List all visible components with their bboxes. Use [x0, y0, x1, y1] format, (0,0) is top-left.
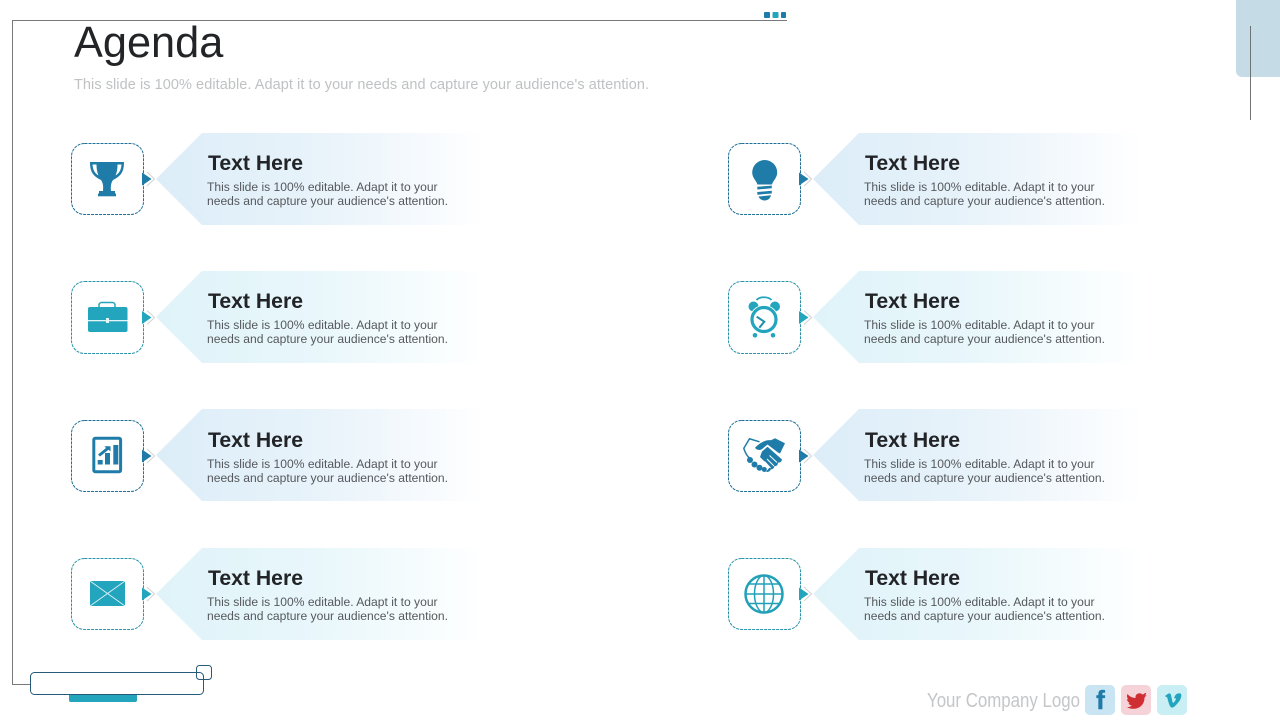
heading: Text Here: [208, 290, 303, 313]
item: light bulb: [728, 133, 1142, 225]
connector arrow: [142, 449, 154, 463]
subtitle: This slide is 100% editable. Adapt it to your needs and capture your audience's attention.: [74, 77, 649, 93]
connector arrow: [142, 172, 154, 186]
description: This slide is 100% editable. Adapt it to your: [207, 595, 438, 609]
description: needs and capture your audience's attention.: [207, 471, 448, 485]
icon box: [728, 282, 800, 354]
social icon: facebook: f: [1096, 685, 1105, 715]
heading: Text Here: [865, 152, 960, 175]
icon: trophy: [90, 162, 124, 196]
bottom left small square: [196, 666, 212, 680]
connector arrow: [142, 587, 154, 601]
social icon: facebook: [1085, 685, 1115, 715]
bottom left tab: [69, 692, 137, 702]
banner: [156, 548, 485, 640]
heading: Text Here: [865, 290, 960, 313]
item: alarm clock: [728, 271, 1142, 363]
social icon: vimeo: [1157, 685, 1187, 715]
description: needs and capture your audience's attention.: [207, 609, 448, 623]
description: needs and capture your audience's attention.: [864, 471, 1105, 485]
description: This slide is 100% editable. Adapt it to your: [207, 318, 438, 332]
icon box: [728, 558, 800, 630]
top decorative squares: [764, 12, 786, 18]
connector arrow: [142, 310, 154, 324]
item: globe: [728, 548, 1142, 640]
description: needs and capture your audience's attention.: [864, 194, 1105, 208]
icon: report chart: [94, 438, 121, 472]
company logo text: Your Company Logo: [927, 690, 1080, 712]
slide frame outline: [12, 20, 787, 684]
icon box: [728, 144, 800, 214]
heading: Text Here: [208, 429, 303, 452]
icon: globe: [746, 576, 782, 612]
description: This slide is 100% editable. Adapt it to your: [864, 595, 1095, 609]
heading: Text Here: [865, 429, 960, 452]
social icon: twitter: [1121, 685, 1151, 715]
description: This slide is 100% editable. Adapt it to your: [864, 318, 1095, 332]
connector arrow: [799, 172, 812, 186]
banner: [813, 548, 1142, 640]
icon: light bulb: [752, 160, 777, 200]
connector arrow: [799, 310, 812, 324]
connector arrow: [799, 449, 812, 463]
description: needs and capture your audience's attention.: [864, 332, 1105, 346]
item: briefcase: [72, 271, 485, 363]
item: trophy: [72, 133, 485, 225]
item: report chart: [72, 409, 485, 501]
banner: [813, 409, 1142, 501]
description: needs and capture your audience's attention.: [207, 194, 448, 208]
banner: [156, 409, 485, 501]
banner: [813, 271, 1142, 363]
icon: alarm clock: [748, 297, 780, 338]
item: handshake: [728, 409, 1142, 501]
description: This slide is 100% editable. Adapt it to your: [864, 457, 1095, 471]
icon box: [72, 558, 144, 630]
icon: handshake: [744, 438, 785, 472]
icon: envelope: [90, 581, 125, 606]
heading: Text Here: [865, 567, 960, 590]
icon box: [72, 144, 144, 214]
icon box: [72, 420, 144, 492]
description: This slide is 100% editable. Adapt it to your: [207, 180, 438, 194]
bottom left rounded bar: [30, 672, 204, 694]
description: This slide is 100% editable. Adapt it to your: [864, 180, 1095, 194]
heading: Text Here: [208, 567, 303, 590]
description: needs and capture your audience's attention.: [864, 609, 1105, 623]
connector arrow: [799, 587, 812, 601]
description: needs and capture your audience's attention.: [207, 332, 448, 346]
top right tab with line: [1236, 0, 1280, 120]
banner: [813, 133, 1142, 225]
heading: Text Here: [208, 152, 303, 175]
icon box: [72, 282, 144, 354]
icon: briefcase: [88, 302, 128, 332]
banner: [156, 271, 485, 363]
banner: [156, 133, 485, 225]
title: Agenda: [74, 19, 224, 67]
item: envelope: [72, 548, 485, 640]
icon box: [728, 420, 800, 492]
description: This slide is 100% editable. Adapt it to your: [207, 457, 438, 471]
